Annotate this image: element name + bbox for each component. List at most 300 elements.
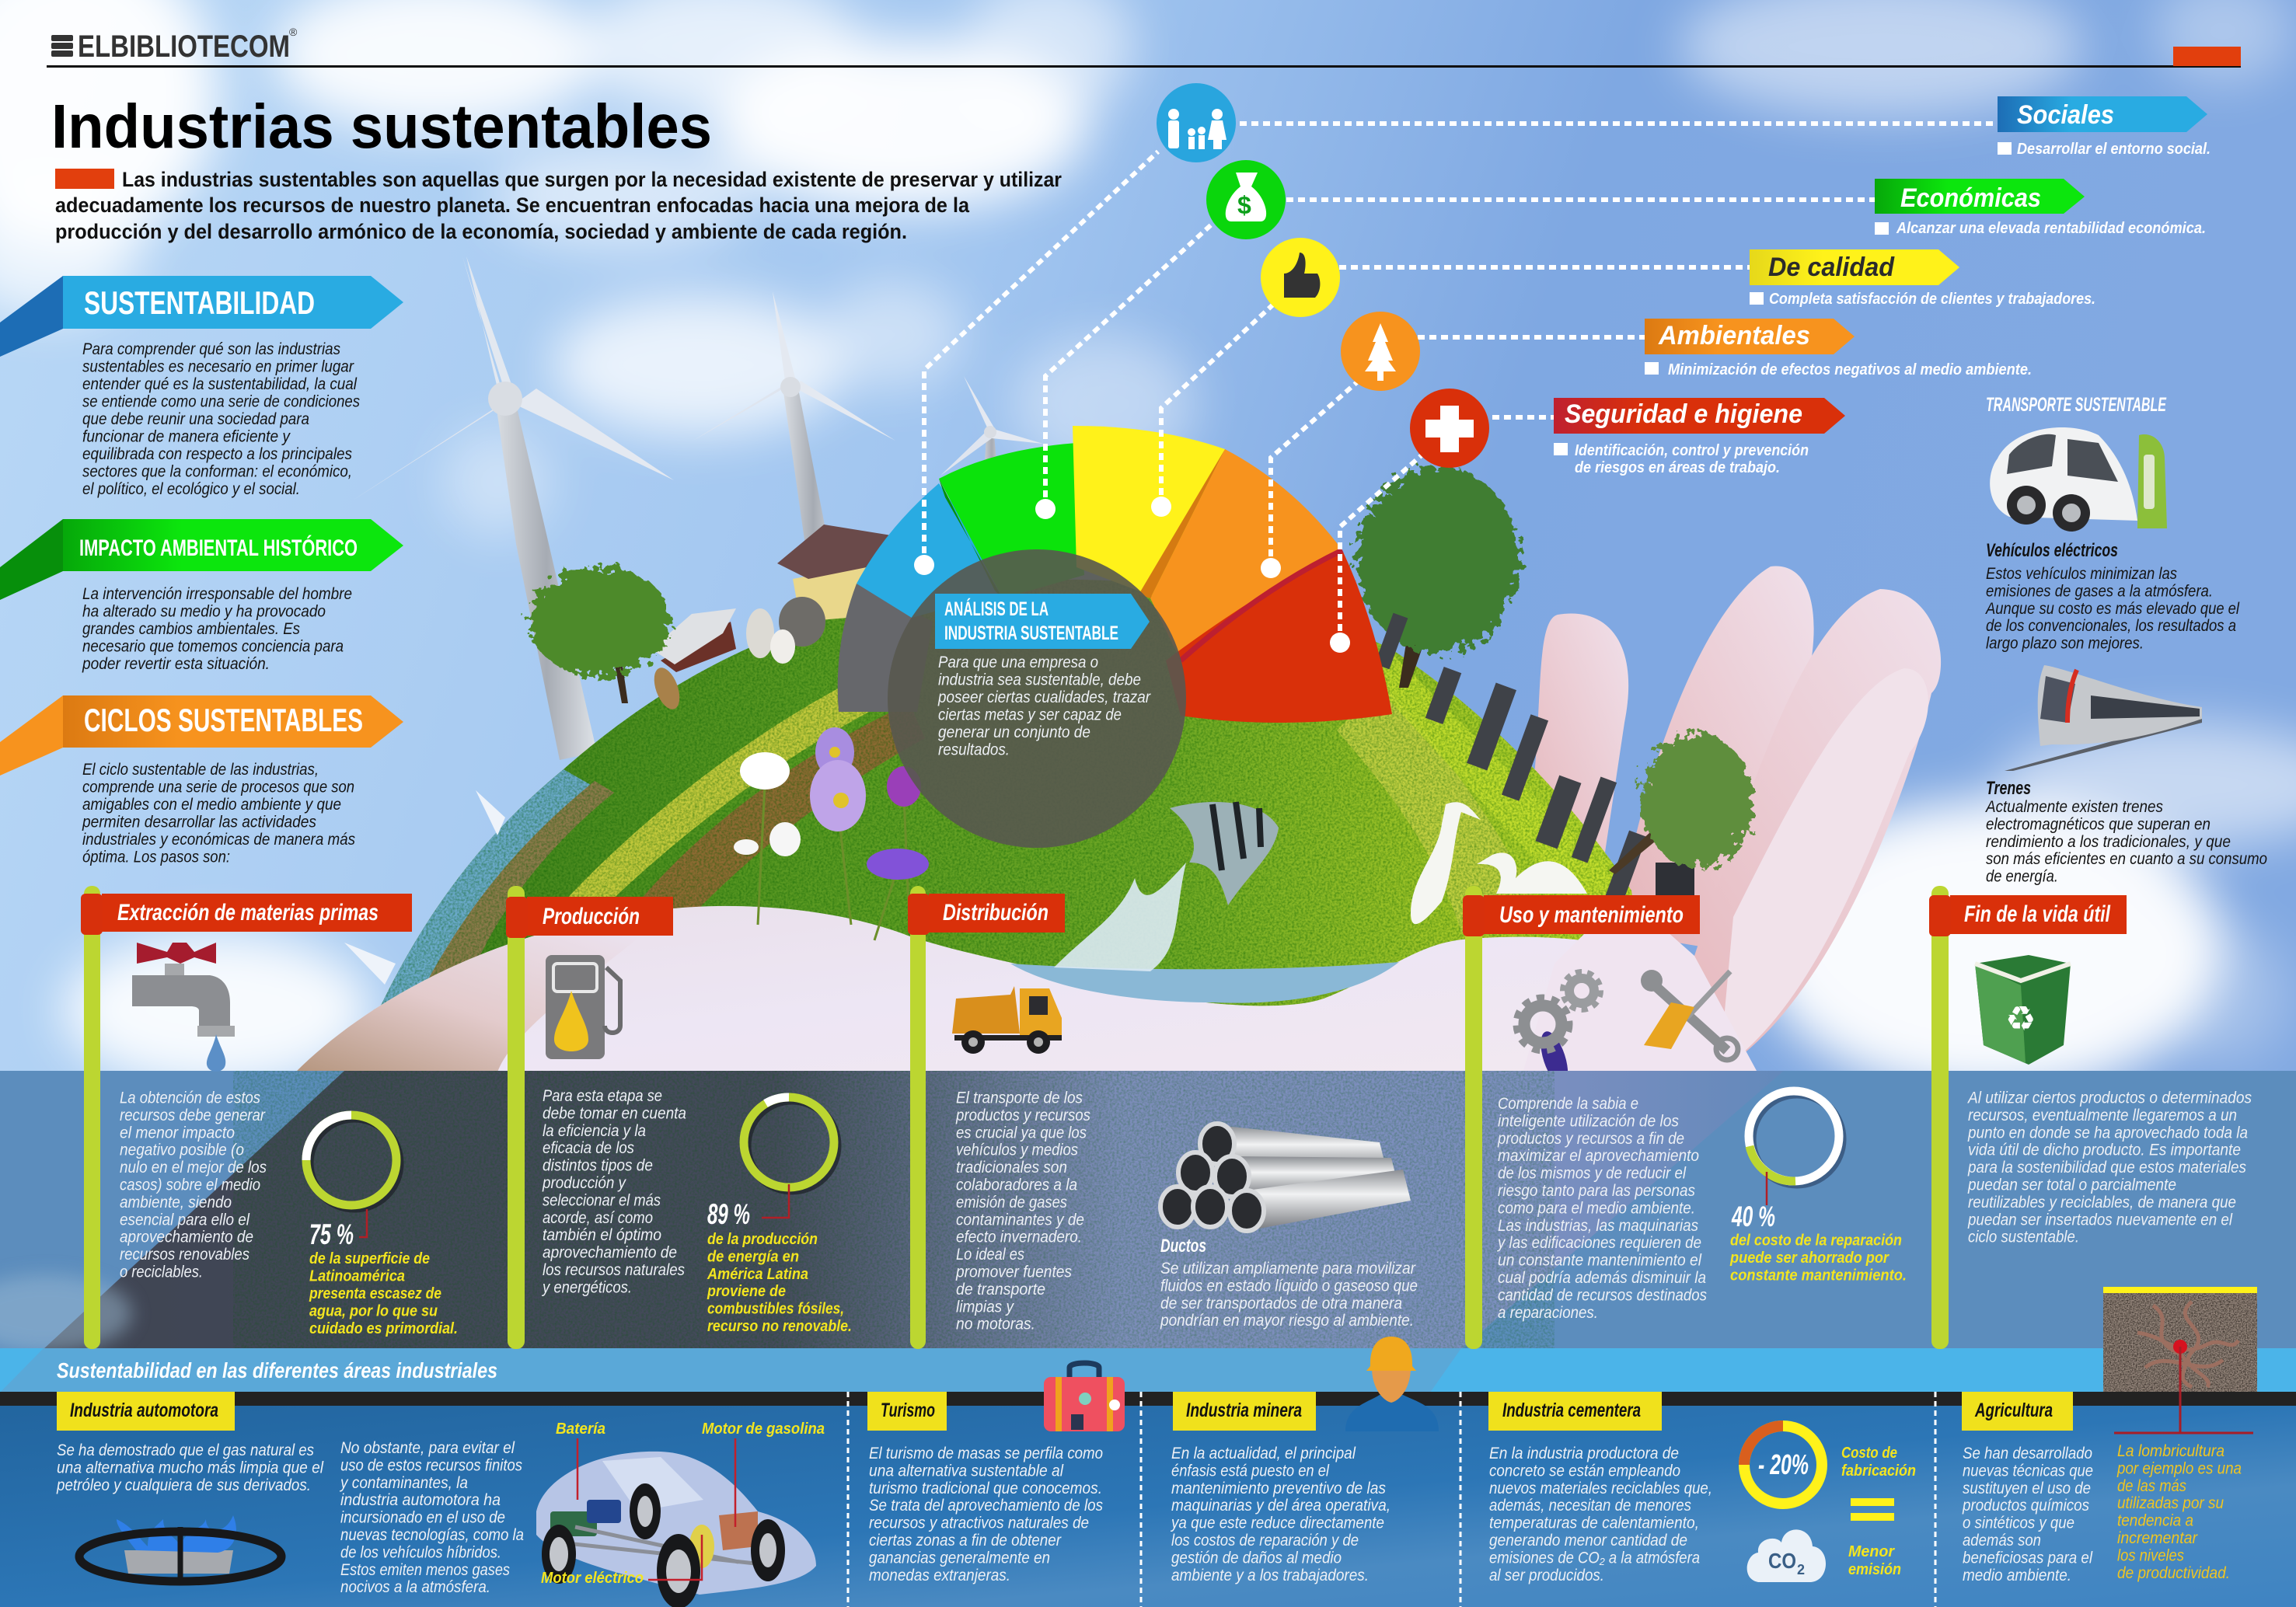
- callout: lombricultura: tendencia a: [2117, 1512, 2193, 1530]
- text: sustentabilidad: [82, 340, 360, 498]
- text: vehículos eléctricos: Aunque su costo es más elevado que el: [1984, 600, 2240, 618]
- text: cementera: concreto se están empleando: [1489, 1462, 1680, 1480]
- banner: análisis: INDUSTRIA SUSTENTABLE: [944, 622, 1118, 644]
- text: ciclos sustentables: [82, 761, 355, 866]
- text: distribución: [955, 1089, 1090, 1333]
- car part labels: Motor de gasolina: [702, 1421, 825, 1438]
- text: uso y mantenimiento: maximizar el aprovechamiento: [1498, 1147, 1699, 1165]
- text: sustentabilidad: sectores que la conforman: el económico,: [82, 463, 352, 480]
- donut: 75%: [306, 1115, 400, 1250]
- text: ductos: [1160, 1236, 1418, 1330]
- text: vehículos eléctricos: largo plazo son mejores.: [1986, 635, 2144, 653]
- callout: lombricultura: de las más: [2117, 1477, 2186, 1495]
- callout: 40%: [1729, 1232, 1907, 1284]
- text: minera: los costos de reparación y de: [1171, 1532, 1359, 1549]
- car part labels: [541, 1421, 825, 1587]
- text: uso y mantenimiento: inteligente utilización de los: [1498, 1112, 1679, 1130]
- text: cementera: [1489, 1445, 1712, 1584]
- photo: earthworms: [2103, 1287, 2257, 1392]
- label: costo de fabricación: fabricación: [1841, 1462, 1916, 1480]
- spiral fan chart: [838, 426, 1392, 723]
- text: turismo: monedas extranjeras.: [869, 1567, 1010, 1584]
- donut: 75%: 75 %: [309, 1218, 354, 1250]
- tag: económicas: Económicas: [1900, 183, 2041, 213]
- tag: de calidad: [1750, 249, 2095, 308]
- text: distribución: limpias y: [956, 1298, 1014, 1316]
- text: vehículos eléctricos: Vehículos eléctricos: [1986, 540, 2118, 561]
- text: producción: aprovechamiento de: [543, 1244, 677, 1262]
- text: vehículos eléctricos: Estos vehículos minimizan las: [1986, 565, 2177, 583]
- icon: recycling bin: ♻: [2005, 1000, 2036, 1038]
- text: producción: y energéticos.: [541, 1278, 632, 1296]
- text: trenes: electromagnéticos que superan en: [1986, 815, 2211, 833]
- callout: 89%: América Latina: [707, 1266, 808, 1283]
- text: producción: eficacia de los: [543, 1139, 634, 1157]
- text: análisis: generar un conjunto de: [938, 723, 1090, 741]
- text: ductos: fluidos en estado líquido o gaseoso que: [1160, 1277, 1418, 1295]
- text: impacto ambiental: [82, 585, 352, 673]
- text: producción: acorde, así como: [543, 1209, 653, 1227]
- icon: CO2 cloud: [1747, 1529, 1826, 1582]
- text: extracción: esencial para ello el: [120, 1211, 250, 1229]
- banner: sustentabilidad: SUSTENTABILIDAD: [84, 284, 315, 321]
- text: sustentabilidad: se entiende como una serie de condiciones: [82, 393, 360, 410]
- boats on the shore: [344, 790, 505, 985]
- logo: ELBIBLIOTECOM: [78, 30, 290, 64]
- icon: family: [1157, 83, 1236, 162]
- text: fin de la vida útil: puedan ser total o parcialmente: [1967, 1176, 2176, 1194]
- icon: CO2 cloud: CO: [1768, 1549, 1796, 1573]
- text: trenes: Trenes: [1986, 778, 2031, 799]
- tree: small on palm: [1609, 734, 1753, 874]
- step 4: uso y mantenimiento: [1463, 886, 1907, 1349]
- text: agricultura: beneficiosas para el: [1963, 1549, 2093, 1567]
- callout: lombricultura: de productividad.: [2117, 1564, 2230, 1582]
- text: trenes: rendimiento a los tradicionales, y que: [1986, 833, 2231, 851]
- text: vehículos eléctricos: [1984, 540, 2240, 653]
- tag: ambientales: Minimización de efectos negativos al medio ambiente.: [1668, 361, 2032, 378]
- illustration: train: [2005, 665, 2202, 771]
- text: minera: ambiente y a los trabajadores.: [1171, 1567, 1369, 1584]
- banner: ciclos sustentables: CICLOS SUSTENTABLES: [84, 702, 363, 738]
- text: sustentabilidad: Para comprender qué son las industrias: [82, 340, 340, 358]
- text: cementera: emisiones de CO₂ a la atmósfera: [1489, 1549, 1700, 1567]
- tag: ambientales: [1645, 319, 2032, 378]
- text: híbridos: nocivos a la atmósfera.: [340, 1578, 490, 1596]
- sheep: [746, 597, 825, 664]
- car part labels: Motor eléctrico: [541, 1570, 644, 1587]
- text: extracción: aprovechamiento de: [120, 1229, 253, 1246]
- callout: 75%: agua, por lo que su: [309, 1302, 438, 1319]
- text: sustentabilidad: entender qué es la sustentabilidad, la cual: [82, 375, 358, 393]
- panel: agricultura: Agricultura: [1974, 1400, 2053, 1421]
- pointer: earthworms callout: [2114, 1340, 2253, 1433]
- text: ciclos sustentables: El ciclo sustentable de las industrias,: [82, 761, 319, 779]
- text: producción: distintos tipos de: [543, 1157, 653, 1175]
- text: producción: seleccionar el más: [543, 1191, 661, 1209]
- text: cementera: nuevos materiales reciclables que,: [1489, 1480, 1712, 1497]
- text: análisis: industria sea sustentable, debe: [938, 671, 1141, 688]
- icon: fuel pump: [546, 955, 620, 1059]
- tag: sociales: Desarrollar el entorno social.: [2017, 141, 2211, 158]
- text: fin de la vida útil: puedan ser insertados nuevamente en el: [1967, 1211, 2233, 1229]
- tag: económicas: [1875, 179, 2206, 237]
- callout: 89%: combustibles fósiles,: [707, 1301, 844, 1318]
- text: fin de la vida útil: vida útil de dicho producto. Es importante: [1968, 1142, 2241, 1159]
- step 1: extracción: Extracción de materias primas: [117, 900, 379, 926]
- lower blue panel: [0, 1405, 2296, 1607]
- tag: seguridad e higiene: Seguridad e higiene: [1565, 399, 1802, 429]
- callout: lombricultura: utilizadas por su: [2117, 1494, 2224, 1512]
- tree: right: [1356, 466, 1520, 688]
- banner: análisis: [935, 594, 1150, 649]
- text: minera: mantenimiento preventivo de las: [1171, 1480, 1386, 1497]
- tag: seguridad e higiene: Identificación, control y prevención: [1575, 442, 1809, 459]
- text: híbridos: incursionado en el uso de: [340, 1509, 505, 1527]
- donut: 89%: [707, 1097, 837, 1230]
- text: ciclos sustentables: permiten desarrollar las actividades: [82, 813, 316, 831]
- text: híbridos: No obstante, para evitar el: [340, 1439, 515, 1457]
- tag: sociales: [1998, 96, 2211, 158]
- text: uso y mantenimiento: y las edificaciones requieren de: [1496, 1234, 1701, 1252]
- car on the hand: [1535, 1028, 1573, 1088]
- tag: de calidad: Completa satisfacción de clientes y trabajadores.: [1769, 291, 2095, 308]
- tag: sociales: Sociales: [2017, 100, 2114, 130]
- text: agricultura: sustituyen el uso de: [1963, 1480, 2091, 1497]
- text: uso y mantenimiento: riesgo tanto para las personas: [1498, 1182, 1695, 1200]
- text: turismo: ganancias generalmente en: [869, 1549, 1050, 1567]
- text: gas natural: [56, 1441, 324, 1494]
- text: uso y mantenimiento: como para el medio ambiente.: [1498, 1199, 1695, 1217]
- text: ciclos sustentables: comprende una serie de procesos que son: [82, 779, 354, 796]
- text: turismo: ciertas zonas a fin de obtener: [869, 1532, 1062, 1549]
- text: distribución: tradicionales son: [956, 1159, 1067, 1176]
- text: trenes: [1984, 778, 2267, 886]
- tag: económicas: Alcanzar una elevada rentabilidad económica.: [1896, 220, 2206, 237]
- step 3: distribución: [908, 886, 1418, 1349]
- icon: wrench and screwdriver: [1641, 970, 1738, 1060]
- text: sustentabilidad: que debe reunir una sociedad para: [82, 410, 309, 428]
- text: híbridos: de los vehículos híbridos.: [340, 1543, 501, 1561]
- text: extracción: recursos renovables: [120, 1246, 249, 1264]
- text: impacto ambiental: ha alterado su medio y ha provocado: [82, 603, 326, 620]
- callout: 40%: puede ser ahorrado por: [1729, 1250, 1889, 1267]
- text: impacto ambiental: La intervención irresponsable del hombre: [82, 585, 352, 603]
- callout: 89%: de energía en: [707, 1248, 799, 1265]
- header rule and red tab: [47, 47, 2241, 68]
- dotted connectors: [924, 124, 1998, 643]
- text: producción: también el óptimo: [543, 1226, 661, 1244]
- text: extracción: La obtención de estos: [120, 1089, 260, 1107]
- icon: equals: [1851, 1498, 1894, 1521]
- text: híbridos: Estos emiten menos gases: [340, 1561, 510, 1579]
- icon: money bag: [1206, 160, 1286, 239]
- text: distribución: es crucial ya que los: [956, 1124, 1087, 1142]
- text: producción: producción y: [542, 1174, 626, 1192]
- text: análisis: ciertas metas y ser capaz de: [938, 706, 1122, 724]
- icon: medical cross: [1410, 389, 1489, 468]
- text: análisis: resultados.: [938, 741, 1010, 758]
- icon: faucet: [132, 943, 235, 1072]
- text: análisis: poseer ciertas cualidades, trazar: [937, 688, 1151, 706]
- barn: [651, 608, 736, 672]
- text: agricultura: [1962, 1445, 2093, 1584]
- text: producción: [541, 1087, 686, 1296]
- callout: 89%: de la producción: [707, 1231, 818, 1248]
- callout: 89%: recurso no renovable.: [707, 1318, 852, 1335]
- callout: 75%: [309, 1250, 458, 1337]
- wind turbine: small: [940, 376, 1043, 528]
- heading: transporte sustentable: TRANSPORTE SUSTENTABLE: [1986, 394, 2167, 416]
- text: cementera: además, necesitan de menores: [1489, 1497, 1691, 1515]
- text: distribución: Lo ideal es: [956, 1246, 1024, 1264]
- text: producción: la eficiencia y la: [543, 1122, 646, 1140]
- panel: industria automotora: [56, 1392, 825, 1607]
- text: distribución: colaboradores a la: [956, 1176, 1077, 1194]
- text: trenes: son más eficientes en cuanto a su consumo: [1986, 850, 2267, 868]
- panel: turismo: [867, 1363, 1125, 1584]
- tag: seguridad e higiene: de riesgos en áreas de trabajo.: [1575, 459, 1780, 476]
- tag: de calidad: De calidad: [1768, 253, 1895, 282]
- icon: dump truck: [952, 986, 1062, 1054]
- text: extracción: [120, 1089, 267, 1281]
- text: turismo: [869, 1445, 1103, 1584]
- text: cementera: temperaturas de calentamiento,: [1489, 1515, 1699, 1532]
- text: híbridos: y contaminantes, la: [339, 1474, 468, 1492]
- text: impacto ambiental: grandes cambios ambientales. Es: [82, 620, 300, 638]
- black stripe: [0, 1392, 2296, 1406]
- intro text: [55, 168, 1062, 243]
- text: trenes: de energía.: [1986, 868, 2058, 886]
- text: uso y mantenimiento: cantidad de recursos destinados: [1498, 1286, 1707, 1304]
- text: minera: gestión de daños al medio: [1171, 1549, 1342, 1567]
- text: cementera: generando menor cantidad de: [1489, 1532, 1687, 1549]
- text: producción: los recursos naturales: [543, 1261, 685, 1279]
- text: fin de la vida útil: punto en donde se ha aprovechado toda la: [1967, 1124, 2248, 1142]
- text: fin de la vida útil: Al utilizar ciertos productos o determinados: [1966, 1089, 2252, 1107]
- text: fin de la vida útil: [1966, 1089, 2252, 1246]
- hand: palm and thumb: [295, 894, 1757, 1072]
- step 5: fin de la vida útil: [1929, 886, 2252, 1349]
- tag: ambientales: Ambientales: [1658, 321, 1810, 350]
- text: uso y mantenimiento: Comprende la sabia e: [1498, 1095, 1638, 1113]
- text: extracción: negativo posible (o: [120, 1142, 244, 1159]
- panel: industria cementera: Industria cementera: [1502, 1400, 1641, 1421]
- section title: Sustentabilidad en las diferentes áreas industriales: [57, 1358, 497, 1382]
- callout: 75%: presenta escasez de: [309, 1285, 441, 1302]
- step 5: fin de la vida útil: Fin de la vida útil: [1964, 901, 2111, 927]
- text: vehículos eléctricos: de los convencionales, los resultados a: [1986, 617, 2236, 635]
- callout: lombricultura: por ejemplo es una: [2116, 1459, 2242, 1477]
- callout: 40%: constante mantenimiento.: [1730, 1267, 1907, 1284]
- callout: lombricultura: [2116, 1442, 2242, 1582]
- text: sustentabilidad: el político, el ecológico y el social.: [82, 480, 300, 498]
- text: uso y mantenimiento: Las industrias, las maquinarias: [1498, 1217, 1698, 1235]
- text: distribución: emisión de gases: [956, 1194, 1067, 1211]
- text: turismo: recursos y atractivos naturales de: [869, 1515, 1089, 1532]
- dark translucent band: [0, 1071, 2296, 1352]
- text: fin de la vida útil: para la sostenibilidad que estos materiales: [1967, 1159, 2246, 1176]
- text: distribución: productos y recursos: [955, 1107, 1090, 1124]
- text: híbridos: [339, 1439, 524, 1596]
- text: análisis: [937, 654, 1151, 758]
- text: turismo: turismo tradicional que conocemos.: [869, 1480, 1102, 1497]
- text: minera: [1170, 1445, 1391, 1584]
- icon: thumb up: [1261, 238, 1340, 317]
- banner: análisis: ANÁLISIS DE LA: [944, 598, 1049, 620]
- callout: 40%: del costo de la reparación: [1730, 1232, 1902, 1250]
- text: cementera: al ser producidos.: [1489, 1567, 1604, 1584]
- wind turbine: medium: [692, 291, 895, 622]
- text: agricultura: Se han desarrollado: [1963, 1445, 2092, 1462]
- center circle: análisis: [888, 549, 1186, 848]
- connector end dots: [914, 497, 1350, 653]
- text: distribución: contaminantes y de: [956, 1211, 1084, 1229]
- text: impacto ambiental: poder revertir esta situación.: [82, 655, 270, 673]
- panel: industria cementera: [1488, 1392, 1916, 1584]
- text: distribución: efecto invernadero.: [956, 1229, 1082, 1246]
- text: agricultura: medio ambiente.: [1963, 1567, 2071, 1584]
- text: distribución: El transporte de los: [956, 1089, 1083, 1107]
- label: costo de fabricación: [1841, 1445, 1916, 1480]
- icon: tree: [1341, 312, 1420, 391]
- icon: money bag: $: [1237, 191, 1251, 219]
- text: vehículos eléctricos: emisiones de gases a la atmósfera.: [1986, 582, 2213, 600]
- text: ductos: pondrían en mayor riesgo al ambiente.: [1160, 1312, 1414, 1330]
- text: ciclos sustentables: amigables con el medio ambiente y que: [82, 796, 341, 814]
- intro text: Las industrias sustentables son aquellas que surgen por la necesidad existente de preservar y utilizar: [122, 168, 1062, 191]
- banner: impacto ambiental: IMPACTO AMBIENTAL HISTÓRICO: [79, 535, 358, 561]
- text: ductos: Ductos: [1160, 1236, 1206, 1257]
- egrets: [1411, 802, 1587, 924]
- donut: 40%: 40 %: [1731, 1201, 1775, 1232]
- intro text: producción y del desarrollo armónico de la economía, sociedad y ambiente de cada región.: [55, 220, 907, 243]
- text: híbridos: industria automotora ha: [340, 1491, 501, 1509]
- globe with grass fields: [373, 544, 1656, 1010]
- step 2: producción: [506, 886, 852, 1349]
- separators: [848, 1392, 1935, 1607]
- label: menor emisión: [1848, 1543, 1901, 1578]
- text: extracción: o reciclables.: [120, 1264, 203, 1281]
- text: agricultura: nuevas técnicas que: [1963, 1462, 2093, 1480]
- text: minera: ya que este reduce directamente: [1170, 1515, 1384, 1532]
- hand: fingers: [1523, 566, 1941, 1071]
- callout: 89%: proviene de: [707, 1283, 786, 1300]
- text: minera: énfasis está puesto en el: [1171, 1462, 1330, 1480]
- text: ductos: de ser transportados de otra manera: [1160, 1295, 1402, 1312]
- callout: 75%: Latinoamérica: [309, 1268, 405, 1285]
- text: agricultura: o sintéticos y que: [1963, 1515, 2074, 1532]
- step 3: distribución: Distribución: [943, 900, 1049, 926]
- text: uso y mantenimiento: cual podría además disminuir la: [1498, 1269, 1706, 1287]
- title: Industrias sustentables: [51, 92, 712, 161]
- panel: turismo: Turismo: [881, 1400, 935, 1421]
- text: uso y mantenimiento: de los mismos y de reducir el: [1498, 1165, 1687, 1183]
- text: extracción: recursos debe generar: [120, 1107, 266, 1124]
- step 2: producción: Producción: [543, 904, 640, 929]
- text: cementera: En la industria productora de: [1489, 1445, 1679, 1462]
- banner: sustentabilidad: [0, 276, 403, 357]
- text: producción: debe tomar en cuenta: [543, 1104, 686, 1122]
- text: extracción: nulo en el mejor de los: [120, 1159, 267, 1176]
- donut: 89%: 89 %: [707, 1198, 750, 1230]
- flowers: [734, 727, 929, 940]
- car part labels: Batería: [556, 1421, 605, 1438]
- icon: suitcase: [1044, 1363, 1125, 1431]
- dog: [649, 664, 685, 713]
- text: ductos: Se utilizan ampliamente para movilizar: [1160, 1260, 1416, 1278]
- logo: ®: [289, 26, 298, 38]
- water pool and splash: [1010, 863, 1399, 1003]
- banner: impacto ambiental: [0, 519, 403, 600]
- donut: -20%: - 20%: [1758, 1448, 1809, 1480]
- text: fin de la vida útil: reutilizables y reciclables, de manera que: [1968, 1194, 2236, 1211]
- tag: seguridad e higiene: [1554, 398, 1845, 476]
- step 4: uso y mantenimiento: Uso y mantenimiento: [1499, 902, 1684, 928]
- illustration: pipes: [1160, 1124, 1411, 1231]
- city skyline: [1375, 613, 1694, 909]
- text: distribución: de transporte: [956, 1281, 1045, 1298]
- label: menor emisión: Menor: [1848, 1543, 1895, 1560]
- text: agricultura: además son: [1963, 1532, 2041, 1549]
- fish: [1170, 802, 1279, 905]
- text: extracción: ambiente, siendo: [120, 1194, 232, 1211]
- text: producción: Para esta etapa se: [543, 1087, 662, 1105]
- text: análisis: Para que una empresa o: [938, 654, 1098, 671]
- text: sustentabilidad: equilibrada con respecto a los principales: [82, 445, 352, 463]
- wind turbine: large: [351, 256, 674, 760]
- text: fin de la vida útil: recursos, eventualmente llegaremos a un: [1968, 1107, 2237, 1124]
- icon: gears: [1516, 972, 1600, 1051]
- text: uso y mantenimiento: productos y recursos a fin de: [1497, 1130, 1684, 1148]
- text: distribución: no motoras.: [956, 1316, 1035, 1333]
- text: gas natural: una alternativa mucho más limpia que el: [57, 1459, 324, 1476]
- callout: lombricultura: La lombricultura: [2117, 1442, 2224, 1460]
- icon: recycling bin: [1975, 955, 2071, 1065]
- text: trenes: Actualmente existen trenes: [1984, 798, 2163, 816]
- text: híbridos: nuevas tecnologías, como la: [340, 1526, 524, 1544]
- text: uso y mantenimiento: un constante mantenimiento el: [1498, 1252, 1702, 1270]
- text: minera: En la actualidad, el principal: [1171, 1445, 1356, 1462]
- text: uso y mantenimiento: [1496, 1095, 1707, 1322]
- text: sustentabilidad: sustentables es necesario en primer lugar: [82, 357, 354, 376]
- text: agricultura: productos químicos: [1962, 1497, 2089, 1515]
- text: distribución: vehículos y medios: [956, 1142, 1078, 1159]
- illustration: electric car: [1990, 427, 2167, 532]
- text: turismo: Se trata del aprovechamiento de los: [869, 1497, 1103, 1515]
- text: turismo: una alternativa sustentable al: [869, 1462, 1064, 1480]
- intro text: adecuadamente los recursos de nuestro planeta. Se encuentran enfocadas hacia una mejora de la: [55, 193, 970, 217]
- illustration: hybrid car: [536, 1438, 816, 1607]
- panel: industria minera: Industria minera: [1186, 1400, 1302, 1421]
- callout: 75%: cuidado es primordial.: [309, 1320, 458, 1337]
- farm house: [777, 525, 896, 622]
- callout: 89%: [707, 1231, 852, 1335]
- text: gas natural: petróleo y cualquiera de sus derivados.: [56, 1476, 311, 1494]
- text: ciclos sustentables: industriales y económicas de manera más: [82, 831, 355, 849]
- panel: industria automotora: Industria automotora: [70, 1400, 218, 1421]
- icon: miner: [1345, 1337, 1439, 1431]
- tree: left: [529, 567, 672, 703]
- label: menor emisión: emisión: [1848, 1561, 1901, 1578]
- banner: ciclos sustentables: [0, 695, 403, 776]
- label: costo de fabricación: Costo de: [1841, 1445, 1897, 1462]
- donut: 40%: [1731, 1091, 1842, 1232]
- text: extracción: el menor impacto: [120, 1124, 235, 1142]
- callout: 75%: de la superficie de: [309, 1250, 430, 1267]
- text: uso y mantenimiento: a reparaciones.: [1498, 1304, 1598, 1322]
- text: distribución: promover fuentes: [955, 1264, 1072, 1281]
